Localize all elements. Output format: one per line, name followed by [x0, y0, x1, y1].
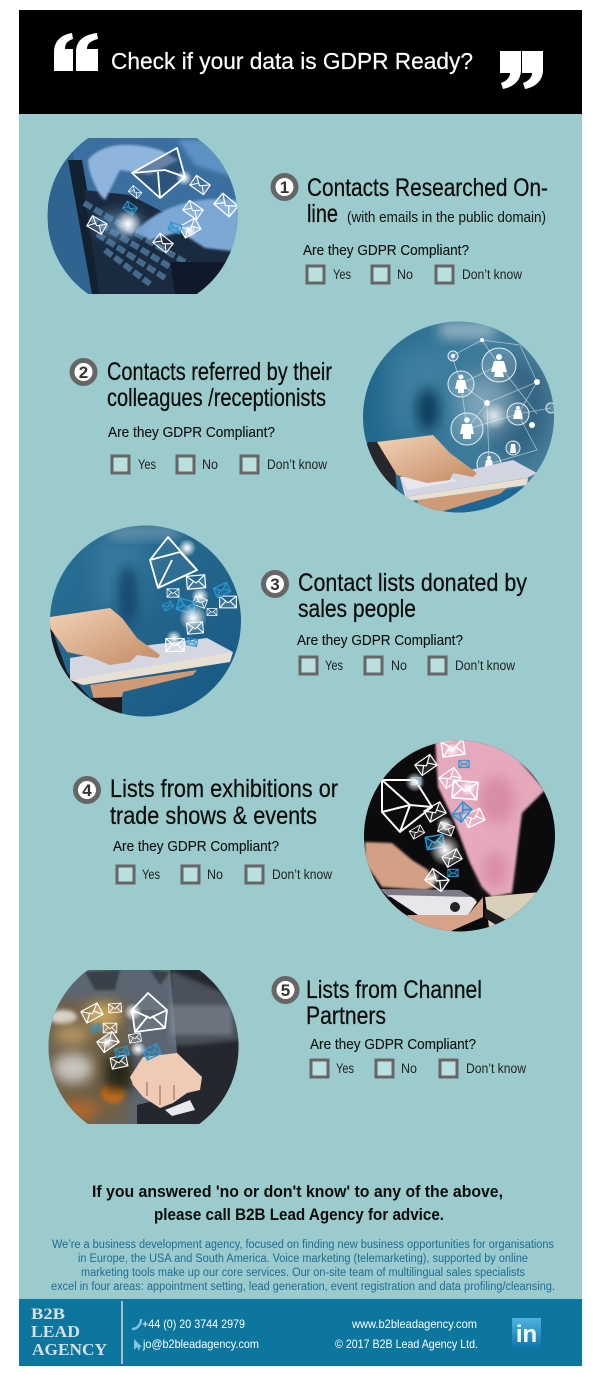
- heading 4: [110, 775, 338, 830]
- agency description: [51, 1239, 555, 1293]
- phone number: +44 (0) 20 3744 2979: [142, 1317, 245, 1331]
- logo: LEAD: [31, 1322, 80, 1341]
- options 4: No: [207, 867, 223, 882]
- item 5: [48, 970, 526, 1124]
- call to action: If you answered 'no or don't know' to any of the above,: [92, 1183, 503, 1201]
- options 5: Don’t know: [466, 1061, 526, 1076]
- photo: tablet with people network: [360, 318, 560, 520]
- heading 1: (with emails in the public domain): [347, 209, 546, 226]
- copyright: © 2017 B2B Lead Agency Ltd.: [335, 1337, 478, 1351]
- badge 2: [72, 360, 95, 384]
- call to action: please call B2B Lead Agency for advice.: [154, 1206, 444, 1224]
- photo: phone with envelopes: [360, 738, 560, 938]
- call to action: [92, 1183, 503, 1224]
- options 3: No: [391, 658, 407, 673]
- email: jo@b2bleadagency.com: [142, 1337, 259, 1351]
- photo: tablet with envelopes: [50, 526, 241, 716]
- logo: [31, 1306, 107, 1359]
- logo: B2B: [31, 1306, 65, 1323]
- question 5: Are they GDPR Compliant?: [310, 1037, 476, 1053]
- options 2: Yes: [138, 457, 156, 472]
- icon: cursor: [134, 1339, 142, 1351]
- heading 3: Contact lists donated by: [298, 569, 527, 597]
- heading 1: [307, 174, 548, 228]
- item 2: [72, 318, 560, 520]
- badge 3: [264, 572, 286, 596]
- options 4: Don’t know: [272, 867, 332, 882]
- heading 5: Lists from Channel: [306, 976, 482, 1004]
- icon: phone: [132, 1319, 141, 1329]
- options 1: Yes: [333, 267, 351, 282]
- heading 5: [306, 976, 482, 1030]
- photo: hands typing with envelopes: [48, 138, 238, 294]
- heading 1: Contacts Researched On-: [307, 174, 548, 202]
- badge 3: 3: [270, 575, 280, 594]
- item 4: [76, 738, 560, 938]
- options 3: Don’t know: [455, 658, 515, 673]
- heading 4: trade shows & events: [110, 802, 317, 830]
- options 3: [300, 657, 515, 674]
- icon: closing quote: [500, 51, 543, 89]
- footer: [19, 1299, 582, 1366]
- options 1: [307, 266, 522, 283]
- options 1: Don’t know: [462, 267, 522, 282]
- question 2: Are they GDPR Compliant?: [108, 425, 275, 441]
- options 2: Don’t know: [267, 457, 327, 472]
- badge 1: 1: [280, 178, 289, 197]
- options 5: Yes: [336, 1061, 354, 1076]
- agency description: marketing tools make up our core services. Our on-site team of multilingual sales specialists: [81, 1267, 525, 1279]
- badge 4: [76, 778, 98, 802]
- options 4: Yes: [142, 867, 160, 882]
- heading 3: [298, 569, 527, 623]
- header banner: [19, 10, 582, 114]
- options 5: [311, 1060, 526, 1077]
- heading 1: line: [307, 200, 338, 228]
- options 5: No: [401, 1061, 417, 1076]
- logo: AGENCY: [32, 1340, 107, 1359]
- badge 1: [273, 176, 296, 198]
- agency description: excel in four areas: appointment setting, lead generation, event registration and data profiling/cleansing.: [51, 1281, 555, 1293]
- agency description: in Europe, the USA and South America. Voice marketing (telemarketing), supported by online: [78, 1253, 528, 1265]
- heading 3: sales people: [298, 595, 416, 623]
- question 3: Are they GDPR Compliant?: [297, 633, 463, 649]
- badge 4: 4: [82, 781, 92, 800]
- icon: linkedin: in: [516, 1321, 537, 1348]
- website: www.b2bleadagency.com: [351, 1317, 477, 1331]
- options 4: [117, 866, 332, 883]
- icon: linkedin: [512, 1318, 541, 1348]
- options 1: No: [397, 267, 413, 282]
- badge 5: 5: [281, 981, 290, 1000]
- heading 2: colleagues /receptionists: [107, 384, 326, 412]
- badge 2: 2: [79, 363, 88, 382]
- heading 2: [107, 358, 332, 412]
- options 2: [112, 456, 327, 473]
- question 1: Are they GDPR Compliant?: [303, 243, 469, 259]
- badge 5: [274, 978, 297, 1002]
- title: Check if your data is GDPR Ready?: [111, 48, 473, 74]
- agency description: We’re a business development agency, focused on finding new business opportunities for organisations: [52, 1239, 554, 1251]
- icon: opening quote: [54, 33, 98, 71]
- heading 4: Lists from exhibitions or: [110, 775, 338, 803]
- options 2: No: [202, 457, 218, 472]
- photo: open hand with envelopes: [48, 970, 238, 1124]
- options 3: Yes: [325, 658, 343, 673]
- question 4: Are they GDPR Compliant?: [113, 839, 279, 855]
- heading 2: Contacts referred by their: [107, 358, 332, 386]
- item 1: [48, 138, 548, 294]
- item 3: [45, 520, 527, 725]
- heading 5: Partners: [306, 1002, 386, 1030]
